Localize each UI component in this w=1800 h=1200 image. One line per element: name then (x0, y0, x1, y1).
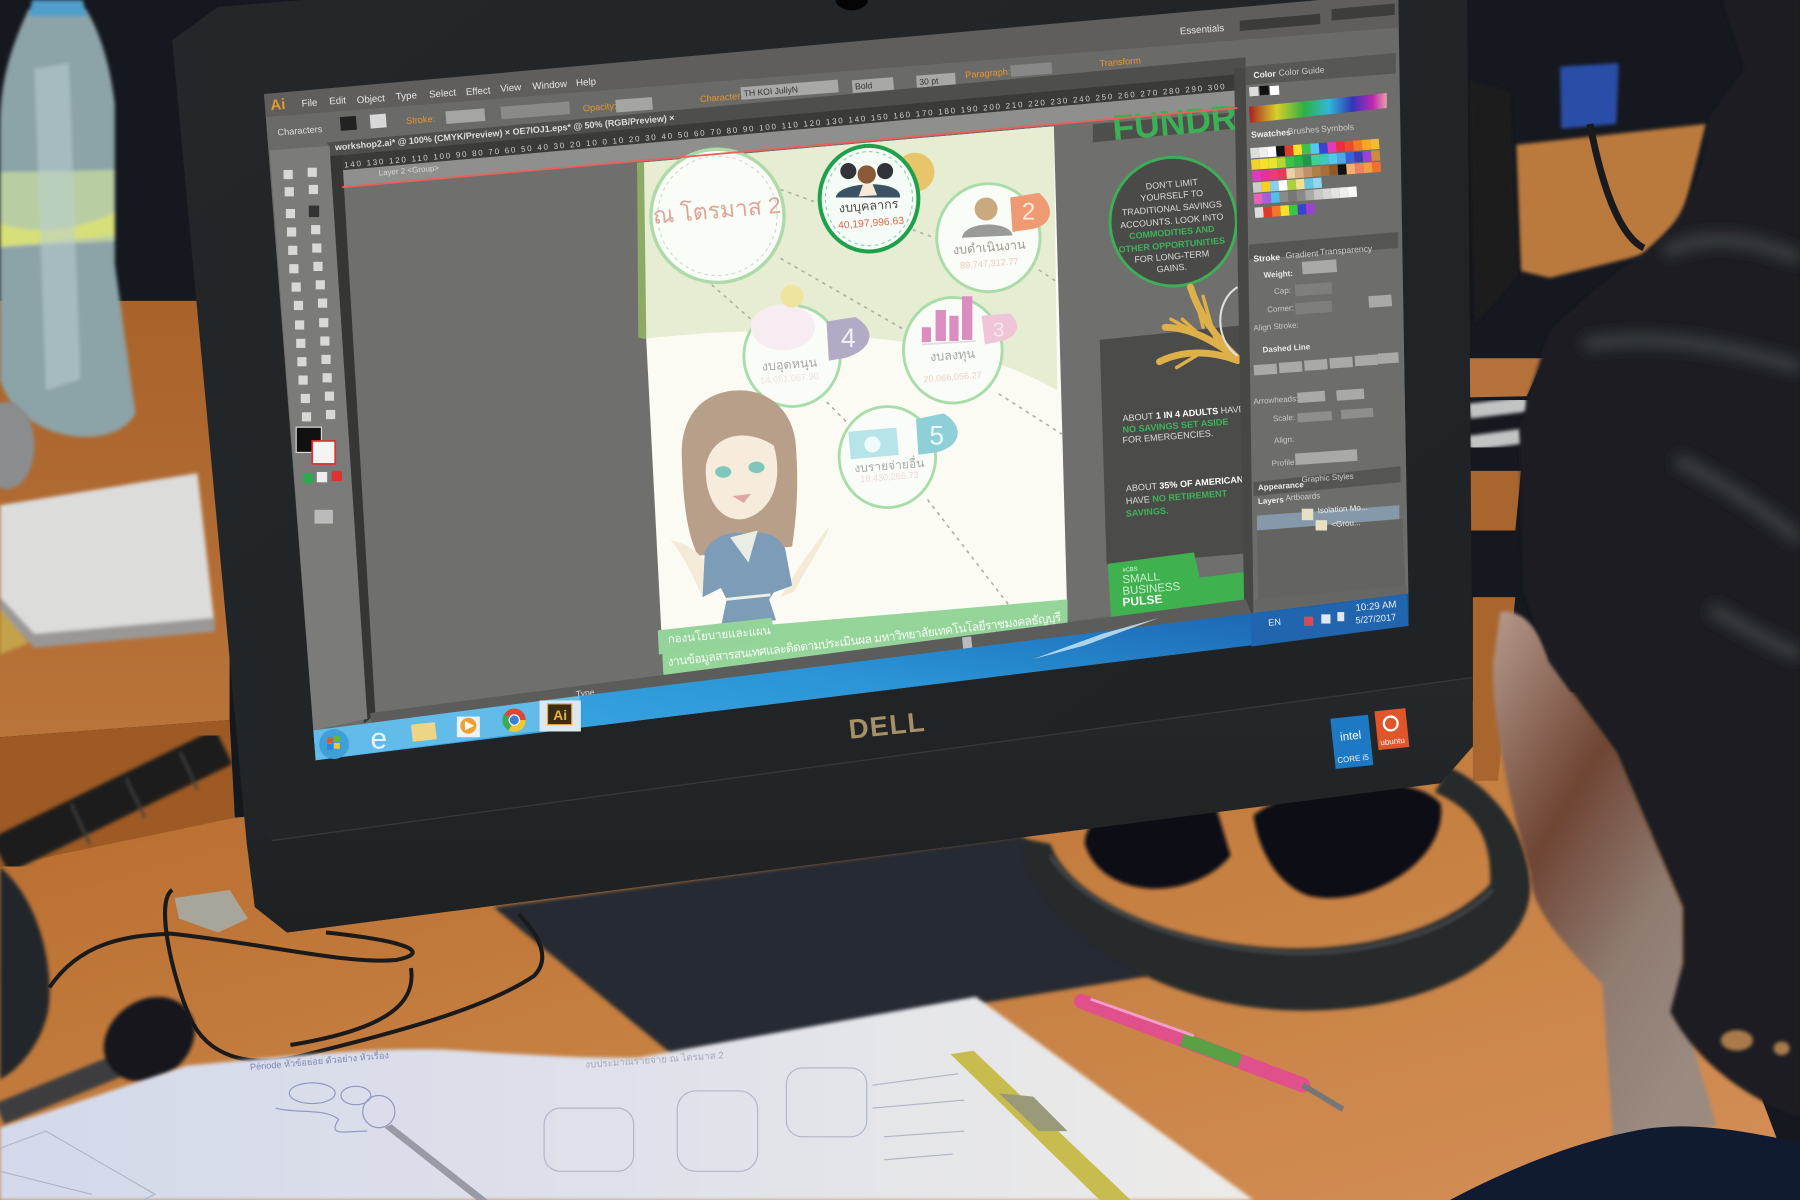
color, swatches and stroke panels: Swatches (1251, 127, 1291, 140)
control bar (266, 28, 1398, 142)
control bar: 30 pt (919, 75, 939, 87)
desktop computer tower behind monitor (1469, 80, 1518, 324)
badge 4: 4 (841, 323, 856, 353)
intel sticker: intel (1340, 730, 1362, 744)
white cables behind monitor (1469, 404, 1527, 443)
orange coin badge (895, 153, 934, 192)
window status bar: Type (575, 687, 595, 699)
circle: subsidy budget: 14,081,067.90 (760, 371, 819, 386)
application menu bar: Window (532, 79, 568, 93)
color, swatches and stroke panels: Cap: (1274, 286, 1291, 296)
green logo block: #CBS (1122, 567, 1138, 574)
statistics text: HAVE NO RETIREMENT (1126, 488, 1228, 506)
vga connector and black cable (1560, 63, 1644, 248)
circle: investment budget: งบลงทุน (930, 347, 976, 365)
statistics text: SAVINGS. (1126, 505, 1169, 519)
application menu bar: View (500, 82, 523, 95)
application menu bar: Help (576, 77, 597, 89)
application menu bar: Essentials (1179, 23, 1225, 37)
application menu bar: File (301, 98, 318, 110)
application menu bar: Edit (329, 95, 347, 107)
color, swatches and stroke panels: Arrowheads: (1253, 394, 1299, 406)
system tray: 5/27/2017 (1355, 612, 1397, 626)
dark panel (1100, 325, 1246, 565)
system tray: 10:29 AM (1355, 599, 1397, 614)
green logo block: BUSINESS (1122, 581, 1181, 598)
document tabs: workshop2.ai* @ 100% (CMYK/Preview) × OE7IOJ1.eps* @ 50% (RGB/Preview) × (334, 113, 675, 153)
neck, ear and skin (1493, 612, 1716, 1139)
white notebook on shelf (0, 473, 215, 655)
chrome icon (502, 709, 526, 732)
circle callout (1110, 157, 1236, 286)
monitor body (172, 0, 1473, 932)
color, swatches and stroke panels: Brushes (1287, 124, 1320, 136)
badge 3: 3 (993, 318, 1004, 341)
circle: other expenses budget: งบรายจ่ายอื่น (854, 454, 925, 475)
application menu bar: Effect (465, 85, 491, 98)
circle: investment budget (903, 296, 1002, 403)
pasteboard (342, 107, 1246, 714)
circle: personnel budget (820, 146, 918, 251)
color, swatches and stroke panels: Gradient (1285, 248, 1319, 260)
DELL logo: DELL (847, 706, 926, 745)
circle callout: TRADITIONAL SAVINGS (1121, 199, 1222, 218)
wheat icon (1159, 287, 1238, 367)
color, swatches and stroke panels: Layers (1258, 495, 1285, 506)
folder icon (411, 722, 437, 742)
color, swatches and stroke panels: Transparency (1320, 243, 1373, 257)
left artboard: Thai budget infographic (637, 126, 1068, 675)
window status bar (370, 599, 1251, 728)
color, swatches and stroke panels: Color (1253, 68, 1277, 80)
circle callout: DON'T LIMIT (1145, 177, 1199, 191)
circle: personnel budget: 40,197,996.63 (838, 216, 905, 232)
color, swatches and stroke panels: Weight: (1263, 269, 1293, 280)
circle: operating budget: 89,747,312.77 (960, 256, 1019, 271)
color, swatches and stroke panels: Scale: (1273, 413, 1295, 423)
circle: subsidy budget (744, 285, 840, 407)
application menu bar: Object (356, 93, 386, 106)
right artboard: savings infographic (1091, 97, 1250, 620)
internet explorer icon: e (371, 723, 387, 756)
vertical ruler (329, 155, 375, 723)
circle callout: OTHER OPPORTUNITIES (1118, 235, 1225, 255)
headset microphone (0, 980, 211, 1114)
isolation mode layer bar: Layer 2 <Group> (378, 163, 440, 178)
color, swatches and stroke panels: Corner: (1267, 303, 1294, 314)
statistics text: ABOUT 35% OF AMERICANS (1126, 474, 1250, 493)
scrollbar (1234, 67, 1254, 616)
circle: quarter 2: ณ โตรมาส 2 (652, 192, 782, 229)
heading fundraising: FUNDR (1111, 97, 1238, 148)
screen (264, 0, 1409, 760)
document tabs (327, 57, 1246, 156)
application menu bar: Ai (270, 96, 286, 114)
circle callout: ACCOUNTS. LOOK INTO (1120, 211, 1224, 230)
green logo block: SMALL (1122, 571, 1160, 586)
circle: quarter 2 (651, 149, 784, 282)
circle callout: COMMODITIES AND (1129, 224, 1215, 241)
illustrated woman (670, 390, 830, 627)
isolation mode layer bar (333, 90, 1246, 187)
system tray (1268, 599, 1397, 628)
collar (1450, 1126, 1800, 1200)
green logo block (1108, 552, 1246, 620)
notes paper: งบประมาณรายจ่าย ณ ไตรมาส 2 (585, 1049, 724, 1071)
hair highlights (1584, 240, 1800, 655)
ubuntu sticker: ubuntu (1380, 736, 1405, 747)
color, swatches and stroke panels: Artboards (1285, 491, 1321, 503)
statistics text: FOR EMERGENCIES. (1122, 428, 1214, 445)
color, swatches and stroke panels (1246, 53, 1409, 616)
monitor stand (494, 836, 1148, 1054)
circle: investment budget: 20,066,056.27 (923, 370, 982, 384)
control bar: TH KOI JuliyN (743, 84, 798, 98)
control bar: Paragraph: (965, 67, 1011, 80)
illustrator icon: Ai (553, 708, 567, 723)
start orb (319, 729, 349, 759)
color, swatches and stroke panels: Align: (1274, 435, 1294, 445)
circle: operating budget: งบดำเนินงาน (952, 238, 1026, 257)
white ring (1220, 287, 1238, 356)
circle: other expenses budget (839, 407, 936, 508)
color, swatches and stroke panels: Align Stroke: (1253, 321, 1299, 333)
person in foreground (1450, 0, 1800, 1200)
control bar: Characters (277, 124, 323, 137)
left headset and desk cables (0, 867, 542, 1079)
circle: other expenses budget: 18,430,266.73 (860, 470, 919, 484)
grey microphone foam (0, 402, 34, 489)
badge 4 (827, 317, 869, 361)
statistics text: NO SAVINGS SET ASIDE (1122, 417, 1229, 435)
control bar: Transform (1099, 55, 1142, 69)
tools panel (270, 146, 367, 730)
red artboard guide line (342, 108, 1238, 187)
ubuntu sticker (1374, 708, 1409, 750)
hair (1520, 0, 1800, 1117)
statistics text: ABOUT 1 IN 4 ADULTS HAVE (1122, 404, 1245, 423)
application menu bar: Select (429, 87, 457, 101)
light showing through hair (1721, 1030, 1790, 1055)
spiral cable tube (0, 746, 224, 856)
green logo block: PULSE (1122, 592, 1163, 609)
pink pen (1081, 999, 1343, 1109)
color, swatches and stroke panels: Stroke (1253, 252, 1281, 264)
color, swatches and stroke panels: Symbols (1321, 122, 1354, 134)
statistics text (1122, 404, 1250, 519)
badge 3 (982, 313, 1017, 344)
system tray: EN (1268, 617, 1281, 628)
water bottle (0, 0, 135, 437)
application menu bar: Type (395, 90, 417, 103)
circle callout: YOURSELF TO (1140, 188, 1204, 203)
dashed connector lines (712, 189, 1062, 614)
badge 5: 5 (929, 420, 944, 450)
control bar: Character: (700, 91, 743, 104)
circle callout: GAINS. (1156, 262, 1187, 274)
color, swatches and stroke panels: Profile: (1271, 457, 1297, 468)
notes paper: Période หัวข้อย่อย ตัวอย่าง หัวเรื่อง (249, 1048, 389, 1072)
circle: operating budget (937, 184, 1040, 292)
intel sticker: CORE i5 (1337, 753, 1370, 765)
circle: personnel budget: งบบุคลากร (838, 197, 899, 216)
windows taskbar (313, 594, 1409, 760)
color, swatches and stroke panels: Isolation Mo... (1317, 503, 1368, 515)
color, swatches and stroke panels: Dashed Line (1262, 342, 1311, 355)
color, swatches and stroke panels: <Grou... (1331, 518, 1361, 529)
badge 2 (1010, 193, 1050, 232)
color, swatches and stroke panels: Appearance (1258, 480, 1305, 492)
application menu bar (264, 0, 1398, 117)
illustrator icon (540, 700, 581, 731)
badge 5 (916, 413, 958, 455)
circle callout: FOR LONG-TERM (1134, 248, 1210, 265)
circle: subsidy budget: งบอุดหนุน (761, 355, 818, 375)
intel sticker (1330, 715, 1373, 769)
media player icon (457, 717, 480, 737)
control bar: Bold (855, 80, 873, 92)
color, swatches and stroke panels: Graphic Styles (1301, 472, 1354, 484)
headset (1022, 767, 1530, 1011)
control bar: Opacity: (583, 101, 617, 113)
color, swatches and stroke panels: Color Guide (1278, 65, 1325, 78)
control bar: Stroke: (406, 114, 436, 126)
badge 2: 2 (1022, 198, 1035, 225)
swatch grid (1250, 139, 1384, 218)
top ruler: 140 130 120 110 100 90 80 70 60 50 40 30 20 10 0 10 20 30 40 50 60 70 80 90 100 110 120 130 140 150 160 170 180 190 200 210 220 230 240 250 260 270 280 290 300 (344, 82, 1226, 170)
notes paper (0, 997, 1254, 1200)
footer band: งานข้อมูลสารสนเทศและติดตามประเมินผล มหาวิทยาลัยเทคโนโลยีราชมงคลธัญบุรี (667, 610, 1063, 670)
footer band: กองนโยบายและแผน (667, 623, 771, 646)
